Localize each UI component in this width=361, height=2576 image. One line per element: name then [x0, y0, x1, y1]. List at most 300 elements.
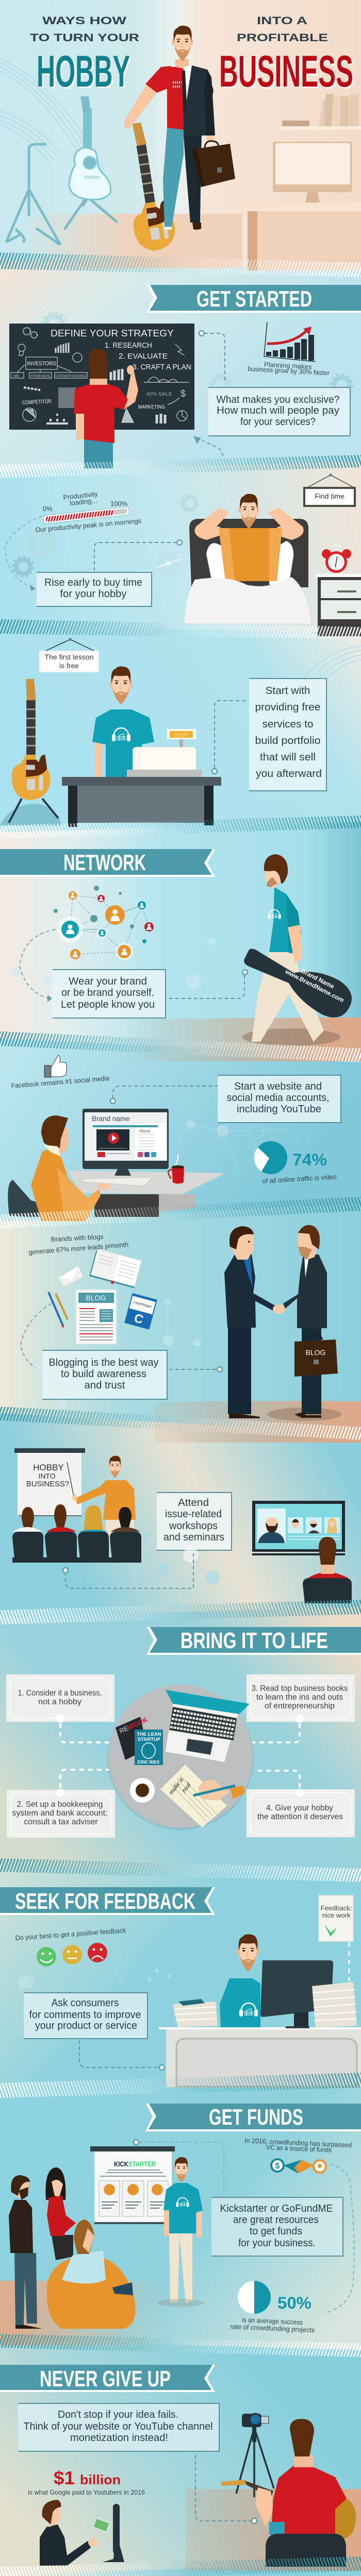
callout: blogging	[42, 1350, 167, 1399]
title: into a profitable	[237, 15, 328, 44]
section banner: network	[0, 849, 215, 877]
callout: free services: Start with	[265, 685, 310, 697]
coffee cup	[130, 1778, 155, 1803]
head	[239, 494, 259, 529]
logo	[268, 910, 281, 919]
businessman paid from screen	[40, 2500, 124, 2566]
note: feedback: Feedback:	[321, 1904, 352, 1912]
floor	[124, 1018, 361, 1061]
thumbs up icon	[44, 1055, 67, 1077]
callout: exclusive: How much will people pay	[217, 405, 339, 416]
callout: wear brand: Let people know you	[61, 999, 155, 1010]
divider stripes	[0, 1600, 361, 1624]
investors diagram: INVESTORS	[27, 361, 56, 367]
step 3 box: 3. Read top business books	[252, 1684, 348, 1693]
value: 74%	[292, 1150, 327, 1169]
book: rework	[116, 1715, 149, 1760]
caption: brands with blogs: generate 67% more leads p/month	[28, 1241, 129, 1256]
note: feedback: nice work	[322, 1911, 351, 1919]
caption	[230, 2316, 315, 2334]
electric guitar	[118, 120, 178, 253]
faint network decoration	[30, 1299, 201, 1409]
callout: ask consumers: your product or service	[35, 2020, 137, 2031]
callout: rise early	[37, 572, 152, 606]
labels: loading...	[70, 497, 97, 507]
investors diagram: CROWDFUNDING	[56, 374, 86, 378]
callout: free services	[249, 679, 326, 791]
note paper: make it	[167, 1775, 185, 1796]
links	[70, 895, 149, 954]
book: lean startup: STARTUP	[138, 1737, 161, 1742]
divider stripes	[0, 2073, 361, 2098]
background: network	[0, 822, 361, 1055]
cash	[93, 2518, 109, 2532]
connector	[195, 2455, 257, 2523]
step 1 box: 1. Consider it a business,	[18, 1689, 102, 1698]
value	[54, 2467, 121, 2488]
callout: kickstarter: for your business.	[238, 2238, 316, 2249]
step 1 box: not a hobby	[38, 1698, 81, 1706]
caption: Our productivity peak is on mornings	[35, 517, 142, 534]
man playing guitar from behind	[221, 2419, 356, 2567]
connector	[134, 2140, 224, 2196]
presenter	[157, 2157, 204, 2307]
divider stripes	[0, 1858, 361, 1882]
labels: 100%	[110, 500, 128, 507]
cash register: 00.00	[174, 733, 188, 738]
callout: exclusive	[208, 387, 350, 436]
teal nodes	[61, 901, 146, 943]
planning chart	[248, 322, 330, 377]
video player	[96, 1129, 130, 1157]
note connector	[349, 1942, 350, 1981]
music staff decoration	[0, 58, 103, 178]
divider stripes	[0, 2556, 361, 2576]
background: get started	[0, 261, 361, 471]
caption: facebook: Facebook remains #1 social media	[11, 1074, 110, 1090]
callout: kickstarter: to get funds	[250, 2226, 302, 2237]
callout: free services: you afterward	[256, 768, 322, 779]
alarm clock	[322, 545, 351, 573]
hand	[88, 2538, 97, 2547]
pie chart: 50%	[230, 2281, 315, 2334]
red shirt	[271, 2465, 347, 2537]
shirt	[220, 1978, 260, 2027]
callout: ask consumers: for comments to improve	[29, 2009, 141, 2021]
jeans	[269, 2522, 285, 2535]
callout: exclusive: for your services?	[240, 416, 316, 428]
head	[110, 666, 132, 705]
chalk labels	[22, 388, 186, 410]
about list	[138, 1129, 155, 1150]
divider stripes	[0, 252, 188, 273]
chalk heading: DEFINE YOUR STRATEGY	[51, 328, 174, 338]
step 4 box: the attention it deserves	[257, 1812, 343, 1821]
acoustic guitar on stand	[64, 96, 118, 229]
caption: crowdfunding: VC as a source of funds	[266, 2143, 332, 2154]
music staff decoration	[294, 646, 361, 698]
labels	[43, 490, 128, 513]
chalk list: 2. EVALUATE	[119, 352, 168, 361]
callout: blogging: Blogging is the best way	[48, 1357, 159, 1368]
divider stripes	[0, 820, 185, 839]
arc arrow to callout	[20, 929, 56, 1002]
divider stripes	[0, 1031, 183, 1054]
flipchart: BUSINESS?	[26, 1480, 69, 1488]
person at computer	[8, 1109, 225, 1221]
gear decorations	[14, 313, 352, 576]
callout: rise early: Rise early to buy time	[44, 577, 142, 588]
caption: is an average success	[242, 2316, 303, 2326]
monitor	[83, 1109, 169, 1176]
cards	[99, 2181, 168, 2216]
faint icons: C	[120, 1979, 124, 1985]
red nodes	[97, 895, 154, 931]
woman	[45, 2167, 76, 2260]
laptop	[166, 1690, 250, 1762]
investors diagram	[11, 357, 87, 378]
site heading: Brand name	[92, 1115, 130, 1123]
caption: is what Google paid to Youtubers in 2016	[28, 2488, 145, 2496]
floor	[186, 2489, 361, 2571]
monitor	[103, 2504, 124, 2562]
sign: first lesson: is free	[59, 662, 79, 670]
flipchart: HOBBY	[33, 1463, 64, 1472]
camera on tripod	[236, 2414, 274, 2497]
guitar case: www.BrandName.com	[284, 968, 345, 1004]
green smiley	[37, 1947, 56, 1967]
sweater	[31, 1146, 101, 1221]
person glyphs	[66, 892, 152, 957]
background: blog	[0, 1204, 361, 1433]
title: into a profitable: INTO A	[257, 15, 307, 27]
background: workshops	[0, 1413, 361, 1617]
hero floor	[0, 214, 242, 268]
pillows	[206, 541, 293, 585]
orange nodes	[69, 891, 131, 959]
background: website	[0, 1039, 361, 1222]
step 3 box: of entrepreneurship	[265, 1702, 335, 1710]
arm	[255, 2487, 273, 2527]
callout: free services: services to	[262, 719, 314, 730]
title: hobby	[37, 47, 132, 98]
book: lean startup: ERIC RIES	[138, 1759, 160, 1765]
desk	[68, 1171, 225, 1217]
arc connector	[21, 1303, 52, 1368]
bar	[43, 506, 129, 524]
sign: first lesson: The first lesson	[45, 653, 93, 661]
step 1 box	[6, 1674, 114, 1723]
businessmen shaking hands	[224, 1225, 341, 1421]
legs	[252, 952, 324, 1042]
pencils	[48, 1292, 68, 1327]
social icons	[138, 1152, 156, 1157]
envelope	[59, 1266, 83, 1286]
callout: blogging: and trust	[85, 1380, 125, 1391]
pie chart: 74%	[254, 1141, 337, 1185]
title: into a profitable: PROFITABLE	[237, 32, 328, 44]
background: rise early	[0, 461, 361, 633]
caption: business grow by 30% faster	[248, 365, 330, 377]
divider stripes	[0, 461, 170, 478]
connector	[79, 2040, 165, 2070]
faint icons: B	[114, 1971, 118, 1977]
note paper	[160, 1765, 227, 1827]
participant thumbnails	[288, 1517, 340, 1533]
section banner: get funds	[145, 2104, 361, 2131]
connector from board to callout	[199, 331, 225, 382]
smiley faces	[37, 1943, 107, 1967]
callout: kickstarter: Kickstarter or GoFundME	[220, 2203, 333, 2214]
value: billion	[80, 2472, 121, 2487]
callout: rise early: for your hobby	[60, 588, 127, 600]
arc arrow to callout	[5, 516, 42, 591]
book: rework: RE	[118, 1724, 130, 1735]
right man	[283, 1225, 327, 1418]
caption: rate of crowdfunding projects	[230, 2323, 315, 2334]
hands	[273, 1304, 285, 1314]
flipchart: INTO	[38, 1472, 56, 1480]
chalk labels: COMPETITOR	[22, 398, 52, 406]
sign: first lesson	[39, 638, 99, 672]
red sad	[88, 1943, 107, 1962]
paper stack left	[173, 1999, 218, 2027]
arc arrow	[325, 2164, 354, 2313]
white connectors to table	[60, 1723, 300, 1788]
grey nodes	[54, 886, 134, 928]
desk	[159, 2027, 361, 2087]
title: ways how: WAYS HOW	[42, 15, 126, 27]
note paper: real	[180, 1781, 192, 1794]
floor	[0, 2281, 186, 2345]
guitar case	[238, 938, 358, 1024]
chalk labels: $	[180, 388, 186, 399]
callout: kickstarter	[211, 2197, 343, 2256]
divider stripes	[0, 619, 183, 636]
red growth arrow	[267, 327, 311, 344]
callout: workshops: Attend	[178, 1497, 209, 1509]
callout: exclusive: What makes you exclusive?	[217, 394, 339, 405]
section banner: seek for feedback: SEEK FOR FEEDBACK	[15, 1889, 195, 1914]
step 4 box	[247, 1789, 355, 1837]
webinar screen	[252, 1501, 345, 1555]
background: feedback	[0, 1865, 361, 2090]
callout: website: Start a website and	[234, 1081, 322, 1092]
section banner: network: NETWORK	[63, 850, 146, 875]
caption: brands with blogs	[28, 1233, 129, 1256]
faint icons: A	[108, 1976, 112, 1982]
neck and hair	[290, 2419, 314, 2467]
man at monitor	[173, 1934, 357, 2028]
head	[237, 1934, 259, 1972]
handshake icon	[271, 2159, 326, 2173]
copyblogger book: C	[133, 1311, 145, 1327]
labels: 0%	[43, 505, 53, 513]
callout: website: including YouTube	[237, 1104, 321, 1115]
value: $1	[54, 2467, 75, 2488]
shelf with books	[279, 94, 361, 130]
paper stack right	[312, 1982, 357, 2028]
handshake icon: $	[275, 2162, 280, 2171]
background: never give up	[0, 2341, 361, 2574]
keyboard	[77, 1177, 152, 1186]
callout: wear brand: Wear your brand	[69, 976, 147, 987]
writing hand	[193, 1780, 245, 1800]
caption: positive feedback: Do your best to get a positive feedback	[15, 1926, 126, 1942]
callout: wear brand: or be brand yourself.	[61, 987, 154, 998]
headboard	[189, 519, 308, 587]
caption: brands with blogs: Brands with blogs	[51, 1233, 104, 1243]
title: ways how	[30, 15, 139, 44]
clock decoration	[157, 552, 180, 574]
faint rings	[57, 917, 133, 960]
guitar stand	[6, 144, 60, 245]
suit	[40, 2524, 91, 2566]
monitor back	[260, 1960, 333, 2028]
step 3 box	[247, 1674, 355, 1723]
heads and shirts	[13, 1504, 140, 1533]
briefcase: blog	[294, 1334, 338, 1377]
monitor sketch on board	[58, 387, 76, 408]
investors diagram: FRIENDS	[31, 374, 50, 378]
callout: ask consumers: Ask consumers	[52, 1997, 119, 2009]
chalk labels: 40% SALE	[146, 392, 172, 397]
title: ways how: TO TURN YOUR	[30, 32, 139, 44]
callout: workshops: workshops	[169, 1520, 218, 1532]
brand text: Brand Name	[300, 967, 336, 990]
guitar body	[327, 2495, 356, 2540]
section banner: get funds: GET FUNDS	[209, 2105, 303, 2130]
step 3 box: to learn the ins and outs	[256, 1693, 343, 1702]
section banner: get started: GET STARTED	[196, 286, 312, 312]
faint icons	[18, 1955, 171, 1991]
chair	[8, 1180, 59, 1218]
viewer from behind	[303, 1537, 352, 1603]
sign: find time: Find time	[315, 492, 344, 500]
guitar on stand	[0, 679, 62, 826]
copyblogger book: CopyBlogger	[133, 1300, 153, 1309]
head	[42, 2500, 61, 2527]
yellow neutral	[62, 1945, 82, 1964]
investors diagram: ME.	[13, 374, 20, 378]
man drawing on board	[74, 349, 138, 468]
chalk list: 3. CRAFT A PLAN	[133, 363, 191, 371]
counter desk	[62, 777, 221, 827]
nightstand	[316, 574, 361, 636]
book: rework: WORK	[126, 1715, 149, 1732]
stat: one billion	[28, 2467, 145, 2496]
callout: blogging: to build awareness	[61, 1368, 146, 1380]
teacher	[67, 1456, 136, 1540]
divider stripes	[0, 1206, 182, 1229]
section banner: never give up: NEVER GIVE UP	[40, 2366, 171, 2392]
callout: don't stop: Think of your website or YouTube channel	[24, 2421, 212, 2432]
callout: kickstarter: are great resources	[233, 2214, 319, 2226]
blanket	[184, 577, 311, 623]
connector	[63, 1553, 193, 1588]
arms	[195, 507, 304, 540]
connector	[169, 1367, 222, 1372]
callout: free services: providing free	[255, 702, 321, 713]
arm	[94, 737, 102, 778]
title: hobby: HOBBY	[38, 48, 132, 98]
bars	[266, 335, 314, 361]
left man	[224, 1226, 278, 1418]
man waking in bed	[184, 494, 311, 623]
step 4 box: 4. Give your hobby	[266, 1804, 333, 1812]
walking man with guitar case	[238, 854, 358, 1046]
seated man on bean bag	[47, 2219, 135, 2329]
man at register	[92, 666, 154, 778]
callout: workshops: issue-related	[165, 1509, 222, 1520]
cash register	[127, 729, 202, 778]
arrow back to man	[193, 436, 223, 456]
shirt	[269, 887, 301, 952]
torso	[219, 528, 282, 581]
connector from bed to callout	[94, 540, 182, 571]
briefcase	[192, 141, 235, 187]
floor	[155, 1401, 361, 1443]
divider stripes	[0, 1406, 186, 1430]
pie	[238, 2281, 271, 2314]
step 2 box: 2. Set up a bookkeeping	[17, 1800, 103, 1809]
chairs	[12, 1532, 141, 1563]
coffee mug	[168, 1154, 184, 1184]
callout: workshops: and seminars	[163, 1532, 224, 1543]
callout: ask consumers	[24, 1993, 147, 2039]
kickstarter board	[90, 2146, 175, 2224]
divider stripes	[0, 2334, 361, 2357]
section banner: get started	[146, 285, 361, 313]
step 2 box: system and bank account;	[12, 1809, 107, 1818]
caption: of all online traffic is video	[262, 1173, 337, 1185]
background: first lesson	[0, 626, 361, 832]
blog document: BLOG	[86, 1294, 106, 1302]
pie	[254, 1141, 287, 1174]
faint network decoration	[11, 932, 215, 989]
callout: don't stop: monetization instead!	[70, 2432, 168, 2444]
callout: free services: build portfolio	[255, 735, 321, 747]
note: feedback	[319, 1895, 353, 1941]
round table	[107, 1685, 254, 1830]
callout: website: social media accounts,	[227, 1092, 329, 1104]
bearded man	[9, 2175, 42, 2329]
callout: don't stop: Don't stop if your idea fails.	[58, 2409, 178, 2420]
logo: KICKSTARTER	[114, 2160, 156, 2168]
man half hobby half business	[124, 26, 235, 230]
chalk doodles	[18, 328, 189, 423]
copyblogger book	[124, 1293, 157, 1330]
background: bring it to life	[0, 1607, 361, 1875]
book: lean startup: THE LEAN	[137, 1732, 161, 1737]
about list: About	[139, 1129, 151, 1133]
network graph	[54, 886, 154, 960]
sign: find time	[304, 473, 355, 506]
callout: website	[218, 1075, 341, 1123]
faint network decoration	[187, 1121, 309, 1175]
caption: crowdfunding: In 2016, crowdfunding has surpassed	[244, 2137, 352, 2149]
value: 50%	[277, 2294, 311, 2312]
step 2 box	[7, 1789, 115, 1838]
audience on chairs	[12, 1504, 141, 1563]
hand	[97, 1183, 111, 1189]
connector from man	[166, 970, 248, 998]
hero panel	[0, 15, 361, 270]
open book	[89, 1249, 141, 1290]
faint network decoration	[132, 1532, 219, 1609]
chalk list	[105, 341, 191, 371]
chalk labels: MARKETING	[138, 404, 165, 410]
